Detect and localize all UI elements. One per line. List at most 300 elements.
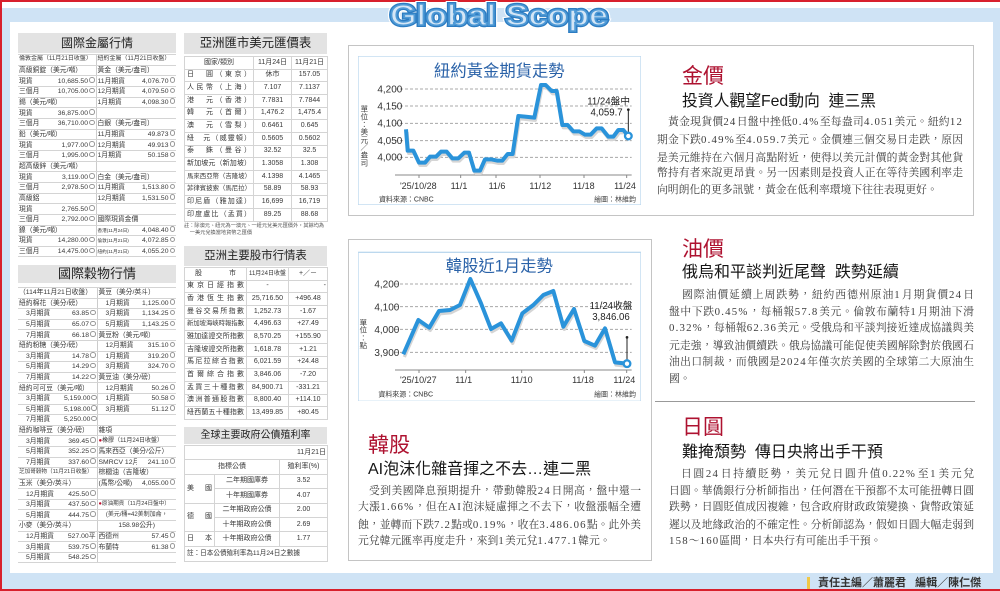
table: metals quotes: 現貨 [19, 206, 33, 213]
table: metals quotes: 3,119.00 [62, 174, 88, 181]
chart: Korea stocks line chart: 韓股近1月走勢 [446, 258, 553, 276]
table: Asian FX quotes: 1.308 [301, 160, 318, 167]
table: metals quotes: 4,076.70 [142, 78, 168, 85]
chart: NY gold futures line chart: 4,059.7 [590, 107, 623, 118]
table: Asian FX quotes: 日 圓（東京） [187, 71, 251, 78]
heading: metals: 國際金屬行情 [61, 36, 133, 50]
table: Asian FX quotes: 0.5602 [299, 135, 320, 142]
table: metals quotes: 1,531.50 [142, 195, 168, 202]
table: grains quotes: 黃豆（美分/英斗） [98, 289, 155, 296]
table: bond yields: 十年期政府公債 [222, 535, 272, 542]
table: metals quotes: 三個月 [19, 184, 39, 191]
table: grains quotes: 玉米（美分/英斗） [19, 480, 75, 487]
table: Asian FX quotes: 1,476.2 [261, 109, 284, 116]
body text: yen: 遲以及地緣政治的不確定性。分析師認為，假如日圓大幅走弱到 [669, 519, 974, 531]
heading: Korea stocks: 韓股 [368, 434, 410, 457]
table: bond yields: 十年期政府公債 [222, 521, 272, 528]
table: bond yields: 3.52 [297, 477, 310, 484]
table: Asian FX quotes: 58.93 [301, 185, 318, 192]
article: gold price [657, 64, 963, 196]
body text: oil: 0.32%，每桶報62.36美元。受俄烏和平談判接近達成協議與美 [669, 322, 974, 334]
table: metals quotes: 三個月 [19, 120, 39, 127]
chart: Korea stocks line chart: 11/24收盤 [590, 300, 633, 312]
panel: Asian FX table [184, 33, 327, 238]
table: grains quotes: 241.10 [148, 459, 169, 466]
table: Asian stock quotes: - [266, 282, 269, 289]
body text: oil [669, 288, 974, 385]
icon: yellow bar [807, 577, 810, 589]
top white strip [2, 2, 1000, 8]
table: bond yields: 4.07 [297, 492, 310, 499]
table: Asian stock quotes: +27.49 [297, 320, 319, 327]
table: Asian FX quotes: 馬來西亞幣（吉隆坡） [187, 173, 251, 180]
table: metals quotes: 10,705.00 [58, 88, 88, 95]
table: metals quotes: 三個月 [19, 152, 39, 159]
table: grains quotes: 雜項 [98, 427, 112, 434]
table: bond yields: 指標公債 [218, 463, 246, 470]
table: Asian stock quotes [184, 267, 328, 420]
table: grains quotes: 352.25 [68, 448, 89, 455]
panel: international metals table [18, 33, 176, 258]
heading: Asian stocks [184, 246, 327, 266]
body text: yen: 日圓。華僑銀行分析師指出，任何潛在干預都不太可能扭轉日圓 [669, 485, 974, 497]
table: Asian FX quotes: 1.3058 [262, 160, 283, 167]
body text: gold: 期金下跌0.49%至4.059.7美元。金價連三個交易日走跌，原因 [657, 134, 963, 146]
table: metals quotes: 4,055.20 [142, 248, 168, 255]
table: metals quotes: 國際現貨金價 [98, 216, 138, 223]
table: metals quotes: 三個月 [19, 88, 39, 95]
table: grains quotes: 3月期貨 [26, 310, 50, 317]
table: metals quotes: 2,978.50 [62, 184, 88, 191]
table: metals quotes: 36,710.00 [58, 120, 88, 127]
table: Asian stock quotes: -7.20 [300, 371, 316, 378]
table: metals quotes: 2,765.50 [62, 206, 88, 213]
chart: NY gold futures line chart [358, 56, 641, 205]
table: grains quotes: 4,055.00 [142, 480, 169, 487]
table: Asian stock quotes: 曼谷交易所指數 [187, 308, 244, 315]
table: metals quotes: 4,072.85 [142, 237, 168, 244]
table: grains quotes: 12月期貨 [106, 342, 133, 349]
table: Asian stock quotes: 孟買三十種指數 [187, 384, 244, 391]
table: Asian stock quotes: +／－ [299, 270, 317, 277]
chart: Korea stocks line chart: 11/1 [455, 375, 472, 385]
body text: gold [657, 116, 963, 196]
table: grains quotes: 棕櫚油（吉隆坡） [98, 469, 153, 476]
table: metals quotes: 12月期貨 [98, 88, 125, 95]
table: Asian stock quotes: 吉隆坡證交所指數 [187, 346, 244, 353]
table: Asian FX quotes: 7.7844 [299, 97, 320, 104]
table: grains quotes: 539.75 [68, 544, 89, 551]
table: grains quotes: 5,159.00 [64, 395, 90, 402]
heading: metals [18, 33, 176, 53]
table: Asian stock quotes: - [324, 282, 326, 289]
heading: oil: 油價 [682, 238, 724, 261]
table: grains quotes: 57.45 [152, 533, 169, 540]
table: metals quotes: 高級銅錠（美元/噸） [19, 67, 82, 74]
table: Asian FX quotes [184, 56, 328, 222]
table: Asian stock quotes: 東京日經指數 [187, 282, 244, 289]
table: grains quotes: 1月期貨 [106, 300, 130, 307]
table: bond yields: 德 國 [187, 513, 212, 520]
chart: Korea stocks line chart: 3,846.06 [592, 312, 630, 323]
table: Asian FX quotes: 人民幣（上海） [187, 84, 251, 91]
table: grains quotes: 紐約可可豆（美元/噸） [19, 385, 89, 392]
table: metals quotes: 現貨 [19, 78, 33, 85]
table: Asian stock quotes: 1,252.73 [254, 308, 281, 315]
table: grains quotes: 7月期貨 [26, 459, 50, 466]
table: grains quotes: 芝加哥穀物（11月21日收盤） [19, 469, 93, 475]
table: grains quotes: 馬來西亞（美分/公斤） [98, 448, 168, 455]
table: Asian stock quotes: 首爾綜合指數 [187, 371, 244, 378]
table: metals quotes: 倫敦(11月21日) [98, 238, 129, 243]
table: Asian FX quotes: 16,699 [262, 198, 283, 205]
table: metals quotes: 10,685.50 [58, 78, 88, 85]
table: metals quotes: 14,280.00 [58, 237, 88, 244]
table: Asian stock quotes: 馬尼拉綜合指數 [187, 358, 244, 365]
table: Asian FX quotes: 休市 [266, 71, 280, 78]
table: Asian stock quotes: +24.48 [297, 358, 319, 365]
table: Asian stock quotes: 雅加達證交所指數 [187, 333, 244, 340]
table: grains quotes: 3月期貨 [26, 395, 50, 402]
table: metals quotes: 50.158 [148, 152, 168, 159]
table: grains quotes: 紐約咖啡豆（美分/磅） [19, 427, 89, 434]
body text: Korea stocks: 元兌韓元匯率再度走升，來到1美元兌1.477.1韓元。 [358, 535, 611, 547]
table: metals quotes: 1月期貨 [98, 99, 122, 106]
table: Asian stock quotes: 8,800.40 [254, 396, 281, 403]
table: metals quotes: 高級鋁 [19, 195, 39, 202]
table: grains quotes: 548.25 [68, 554, 89, 561]
table: Asian stock quotes: 1,618.78 [254, 346, 281, 353]
table: Asian stock quotes: 3,846.06 [254, 371, 281, 378]
table: grains quotes: 1,125.00 [142, 300, 169, 307]
table: Asian FX quotes: 印度盧比（孟買） [187, 211, 251, 218]
table: grains quotes: (美元/桶=42美制加侖， [106, 512, 168, 518]
table: grains quotes: 3月期貨 [26, 353, 50, 360]
table: grains quotes: 319.20 [148, 353, 169, 360]
table: grains quotes: 小麥（美分/英斗） [19, 522, 75, 529]
body text: oil: 國際油價延續上周跌勢，紐約西德州原油1月期貨價24日 [682, 289, 974, 301]
table: grains quotes: ●原油期貨（11月24日盤中） [98, 501, 170, 507]
table: bond yields: 1.77 [297, 535, 310, 542]
heading: bond yields: 全球主要政府公債殖利率 [200, 430, 310, 441]
table: metals quotes: 三個月 [19, 248, 39, 255]
table: metals quotes: 白金（美元/盎司） [98, 174, 154, 181]
subheading: Korea stocks: AI泡沫化雜音揮之不去…連二黑 [368, 461, 591, 478]
table: grains quotes: 布蘭特 [98, 544, 119, 551]
table: grains quotes: 437.50 [68, 501, 89, 508]
table: metals quotes [18, 54, 176, 257]
table: Asian FX quotes: 0.6461 [262, 122, 283, 129]
table: Asian FX quotes: 7.107 [264, 84, 281, 91]
table: grains quotes: 黃豆油（美分/磅） [98, 374, 155, 381]
table: Asian stock quotes: -1.67 [300, 308, 316, 315]
table: grains quotes: 425.50 [68, 491, 89, 498]
table: Asian stock quotes: +114.10 [296, 396, 320, 403]
table: metals quotes: 錫（美元/噸） [19, 99, 62, 106]
table: grains quotes: 65.07 [72, 321, 89, 328]
table: Asian FX quotes: 4.1398 [262, 173, 283, 180]
table: metals quotes: 2,792.00 [62, 216, 88, 223]
table: metals quotes: 36,875.00 [58, 110, 88, 117]
table: Asian FX quotes: 印尼盾（雅加達） [187, 198, 251, 205]
table: bond yields: 殖利率(%) [288, 463, 319, 470]
chart: Korea stocks line chart: 4,100 [374, 302, 400, 313]
heading: yen: 日圓 [682, 416, 724, 439]
table: grains quotes: 3月期貨 [106, 310, 130, 317]
panel: gold section frame [348, 45, 974, 216]
table: Asian FX quotes: 紐 元（威靈頓） [187, 135, 251, 142]
table: Asian FX quotes: 16,719 [299, 198, 320, 205]
body text: Korea stocks [358, 484, 641, 547]
table: Asian FX quotes: 0.645 [301, 122, 318, 129]
chart: NY gold futures line chart: 單位：美元／盎司 [360, 105, 369, 166]
table: metals quotes: 超高級鋅（美元/噸） [19, 163, 82, 170]
table: grains quotes: 14.22 [72, 374, 89, 381]
table: grains quotes: 12月期貨 [26, 533, 54, 540]
table: Asian FX quotes: 泰 銖（曼谷） [187, 147, 251, 154]
table: metals quotes: 14,475.00 [58, 248, 88, 255]
table: bond yields: 十年期國庫券 [226, 492, 268, 499]
table: grains quotes: 50.26 [152, 385, 169, 392]
table: grains quotes: 西德州 [98, 533, 119, 540]
chart: NY gold futures line chart: 11/24 [614, 181, 636, 191]
chart: Korea stocks line chart: 3,900 [374, 348, 400, 359]
note: FX table footnote: 一美元兌換當地貨幣之匯價 [190, 230, 252, 236]
table: grains quotes: 337.60 [68, 459, 89, 466]
table: Asian stock quotes: +1.21 [299, 346, 317, 353]
table: Asian FX quotes: 32.5 [303, 147, 316, 154]
body text: gold: 是美元維持在六個月高點附近，使得以美元計價的黃金對其他貨 [657, 152, 963, 164]
table: grains quotes: 315.10 [148, 342, 169, 349]
table: grains quotes: 63.85 [72, 310, 89, 317]
chart: Korea stocks line chart: 單位：點 [359, 318, 368, 350]
table: grains quotes: 3月期貨 [26, 438, 50, 445]
table: metals quotes: 49.873 [148, 131, 168, 138]
heading: gold: 金價 [682, 65, 724, 88]
table: Asian FX quotes: 港 元（香港） [187, 97, 251, 104]
table: bond yields: 美 國 [187, 485, 212, 492]
table: bond yields: 11月21日 [297, 449, 326, 456]
table: Asian FX quotes: 88.68 [301, 211, 318, 218]
table: grains quotes: 5,198.00 [64, 406, 90, 413]
table: grains quotes: 7月期貨 [26, 332, 50, 339]
chart: NY gold futures line chart: 資料來源：CNBC [379, 194, 434, 203]
body text: yen: 158～160區間，日本央行有可能出手干預。 [669, 535, 881, 547]
table: Asian stock quotes: 84,900.71 [252, 384, 283, 391]
table: metals quotes: 紐約(11月21日) [98, 249, 129, 254]
table: grains quotes: 5月期貨 [26, 554, 50, 561]
table: metals quotes: 11月期貨 [98, 78, 125, 85]
table: metals quotes: 鉛（美元/噸） [19, 131, 62, 138]
table: metals quotes: 1,513.80 [142, 184, 168, 191]
table: metals quotes: 香港(11月24日) [98, 228, 129, 233]
table: Asian FX quotes: 58.89 [264, 185, 281, 192]
panel: government bond yields table [184, 427, 327, 563]
table: grains quotes: 3月期貨 [106, 363, 130, 370]
table: metals quotes: 11月期貨 [98, 131, 125, 138]
title: Global Scope: Global Scope [390, 0, 608, 32]
subheading: yen: 難掩頹勢 傳日央將出手干預 [682, 444, 883, 461]
table: metals quotes: 12月期貨 [98, 195, 125, 202]
table: grains quotes: 527.00平 [68, 533, 96, 540]
table: Asian stock quotes: 4,496.63 [254, 320, 281, 327]
table: Asian stock quotes: +496.48 [295, 295, 321, 302]
chart: NY gold futures line chart: 11/18 [573, 181, 595, 191]
table: grains quotes: 紐約粉糖（美分/磅） [19, 342, 82, 349]
table: grains quotes: 7月期貨 [26, 416, 50, 423]
chart: Korea stocks line chart: 繪圖：林維鈞 [594, 389, 636, 398]
table: grains quotes: 51.12 [152, 406, 169, 413]
table: Asian FX quotes: 7.1137 [299, 84, 320, 91]
table: metals quotes: 倫敦金屬（11月21日收盤） [19, 56, 92, 62]
panel: Asian stock markets table [184, 246, 327, 420]
body text: oil: 國。 [669, 373, 691, 385]
table: Asian FX quotes: 7.7831 [262, 97, 283, 104]
table: grains quotes: 50.58 [152, 395, 169, 402]
table: Asian FX quotes: 菲律賓披索（馬尼拉） [187, 185, 251, 192]
table: metals quotes: 現貨 [19, 237, 33, 244]
table: Asian FX quotes: 4.1465 [299, 173, 320, 180]
note: FX table footnote [184, 222, 324, 236]
table: metals quotes: 現貨 [19, 174, 33, 181]
chart: NY gold futures line chart: 4,100 [377, 119, 403, 130]
table: metals quotes: 12月期貨 [98, 142, 125, 149]
table: metals quotes: 11月期貨 [98, 184, 125, 191]
table: grains quotes: 3月期貨 [26, 544, 50, 551]
table: grains quotes: 1月期貨 [106, 353, 130, 360]
table: grains quotes: 1,134.25 [142, 310, 169, 317]
chart: Korea stocks line chart: 4,200 [374, 280, 400, 291]
table: grains quotes: 369.45 [68, 438, 89, 445]
table: metals quotes: 1,995.00 [62, 152, 88, 159]
table: grains quotes: 324.70 [148, 363, 169, 370]
table: metals quotes: 鎳（美元/噸） [19, 227, 62, 234]
panel: Korea section frame [348, 239, 652, 561]
chart: NY gold futures line chart: 4,000 [377, 153, 403, 164]
table: grains quotes: 61.38 [152, 544, 169, 551]
chart: NY gold futures line chart: 紐約黃金期貨走勢 [434, 62, 565, 80]
chart: Korea stocks line chart: 11/10 [511, 375, 533, 385]
table: metals quotes: 4,098.30 [142, 99, 168, 106]
chart: NY gold futures line chart: 4,200 [377, 84, 403, 95]
table: grains quotes: 3月期貨 [26, 501, 50, 508]
chart: Korea stocks line chart [358, 252, 641, 401]
table: metals quotes: 三個月 [19, 216, 39, 223]
table: Asian stock quotes: +80.45 [297, 409, 319, 416]
table: Asian stock quotes: 25,716.50 [252, 295, 283, 302]
table: bond yields [184, 445, 328, 562]
table: grains quotes: 3月期貨 [106, 406, 130, 413]
table: grains quotes: 5月期貨 [26, 448, 50, 455]
table: Asian FX quotes: 11月21日 [295, 59, 324, 66]
table: Asian FX quotes: 157.05 [299, 71, 320, 78]
table: Asian stock quotes: 13,499.85 [252, 409, 283, 416]
table: grains quotes: 158.98公升) [118, 522, 155, 529]
table: grains quotes: 66.18 [72, 332, 89, 339]
title: Global Scope: Global Scope [390, 0, 608, 32]
table: grains quotes: (馬幣/公噸) [98, 480, 132, 487]
table: Asian FX quotes: 32.52 [264, 147, 281, 154]
divider: oil and yen [655, 401, 975, 402]
chart: NY gold futures line chart: 4,150 [377, 101, 403, 112]
table: grains quotes: 5月期貨 [106, 321, 130, 328]
heading: Asian FX [184, 33, 327, 54]
chart: Korea stocks line chart: 11/18 [572, 375, 594, 385]
table: Asian FX quotes: 韓 元（首爾） [187, 109, 251, 116]
table: grains quotes: 5月期貨 [26, 406, 50, 413]
table: bond yields: 二年期政府公債 [222, 506, 272, 513]
chart: NY gold futures line chart: 11/12 [529, 181, 551, 191]
heading: Asian FX: 亞洲匯市美元匯價表 [200, 36, 311, 50]
panel: international grains table [18, 265, 176, 563]
chart: NY gold futures line chart: '25/10/28 [400, 181, 437, 191]
credits text: 責任主編／蕭麗君 編輯／陳仁傑 [818, 577, 981, 589]
table: Asian FX quotes: 11月24日 [258, 59, 287, 66]
body text: yen [669, 468, 974, 547]
table: grains quotes: 444.75 [68, 512, 89, 519]
chart: Korea stocks line chart: 4,000 [374, 325, 400, 336]
table: grains quotes: 5月期貨 [26, 512, 50, 519]
table: metals quotes: 現貨 [19, 110, 33, 117]
table: metals quotes: 白銀（美元/盎司） [98, 120, 154, 127]
heading: bond yields [184, 427, 327, 444]
table: Asian stock quotes: 6,021.59 [254, 358, 281, 365]
table: grains quotes: 1月期貨 [106, 395, 130, 402]
title: Global Scope: Global Scope [390, 0, 608, 32]
table: Asian stock quotes: 8,570.25 [254, 333, 281, 340]
chart: Korea stocks line chart: '25/10/27 [400, 375, 437, 385]
chart: NY gold futures line chart: 繪圖：林維鈞 [594, 194, 636, 203]
table: metals quotes: 1月期貨 [98, 152, 122, 159]
chart: NY gold futures line chart: 11/6 [489, 181, 505, 191]
heading: Asian stocks: 亞洲主要股市行情表 [204, 250, 307, 262]
note: FX table footnote: 註：除澳元、紐元為一澳元、一紐元兌美元匯價外，其餘均為 [184, 223, 324, 229]
table: Asian FX quotes: 新加坡元（新加坡） [187, 160, 251, 167]
table: bond yields: 2.69 [297, 521, 310, 528]
table: Asian stock quotes: 11月24日收盤 [249, 271, 286, 277]
table: grains quotes: 1,143.25 [142, 321, 169, 328]
table: grains quotes: 7月期貨 [26, 374, 50, 381]
chart: Korea stocks line chart: 11/24 [613, 375, 635, 385]
heading: grains: 國際穀物行情 [58, 266, 136, 281]
table: Asian stock quotes: 新加坡海峽時報指數 [187, 320, 244, 327]
table: metals quotes: 4,048.40 [142, 227, 168, 234]
table: metals quotes: 4,079.50 [142, 88, 168, 95]
table: Asian FX quotes: 89.25 [264, 211, 281, 218]
table: Asian FX quotes: 1,475.4 [298, 109, 321, 116]
article: Korea stocks [358, 434, 641, 547]
table: bond yields: 註：日本公債殖利率為11月24日之數據 [187, 550, 300, 557]
table: Asian stock quotes: 股 市 [195, 270, 236, 277]
table: Asian FX quotes: 0.5605 [262, 135, 283, 142]
body text: gold: 向明朗化的更多訊號，黃金在低利率環境下往往表現更好。 [657, 184, 938, 196]
table: grains quotes: 14.78 [72, 353, 89, 360]
table: grains quotes: 黃豆粉（美元/噸） [98, 332, 155, 339]
table: metals quotes: 49.913 [148, 142, 168, 149]
table: Asian stock quotes: 香港恆生指數 [187, 295, 244, 302]
table: bond yields: 2.00 [297, 506, 310, 513]
table: Asian FX quotes: 國家/類別 [204, 59, 234, 66]
table: grains quotes: 紐約棉花（美分/磅） [19, 300, 82, 307]
table: grains quotes [18, 287, 176, 563]
table: grains quotes: 5,250.00 [64, 416, 90, 423]
table: bond yields: 日 本 [187, 535, 212, 542]
table: grains quotes: 12月期貨 [26, 491, 54, 498]
body text: yen: 跌勢，日圓貶值成因複雜，包含政府財政政策變換、貨幣政策延 [669, 501, 974, 513]
chart: NY gold futures line chart: 11/24盤中 [587, 95, 630, 107]
heading: grains [18, 265, 176, 283]
subheading: oil: 俄烏和平談判近尾聲 跌勢延續 [682, 264, 899, 281]
